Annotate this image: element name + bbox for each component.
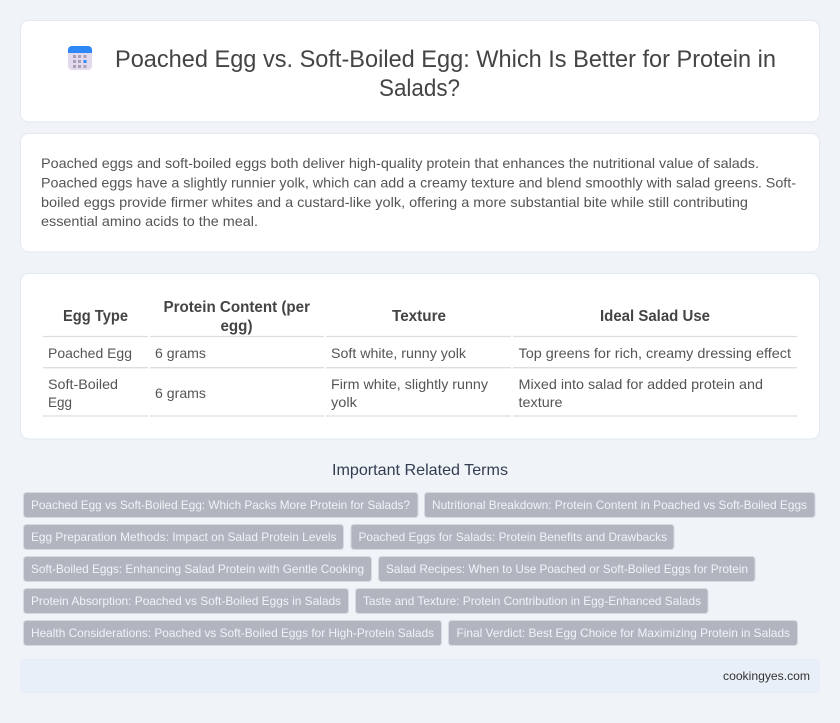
tag: [24, 556, 372, 582]
panel: introduction: [20, 134, 820, 252]
table row: soft-boiled egg: [43, 376, 797, 416]
tag: [424, 492, 815, 518]
table row: poached egg: Poached Egg: [48, 345, 132, 361]
tag: Protein Absorption: Poached vs Soft-Boiled Eggs in Salads: [31, 594, 341, 608]
intro paragraph: Poached eggs and soft-boiled eggs both deliver high-quality protein that enhances the nutritional value of salads.: [41, 155, 759, 171]
title: Salads?: [379, 75, 460, 102]
intro paragraph: essential amino acids to the meal.: [41, 213, 258, 229]
icon: calendar: [68, 46, 92, 70]
table header row: Protein Content (per: [164, 299, 310, 316]
tag: [24, 492, 418, 518]
panel: title header: [20, 20, 820, 122]
tag: [24, 588, 348, 614]
table header row: Texture: [392, 308, 446, 325]
table header row: Ideal Salad Use: [600, 308, 710, 325]
tag: Poached Eggs for Salads: Protein Benefits and Drawbacks: [358, 530, 667, 544]
tag: [24, 620, 442, 646]
tag: [24, 524, 344, 550]
table header row: [43, 299, 797, 336]
heading: important related terms: Important Related Terms: [332, 462, 508, 479]
table row: soft-boiled egg: Mixed into salad for added protein and: [518, 376, 763, 392]
tag: Health Considerations: Poached vs Soft-Boiled Eggs for High-Protein Salads: [31, 626, 434, 640]
title: [115, 46, 776, 102]
intro paragraph: Poached eggs have a slightly runnier yolk, which can add a creamy texture and blend smoothly with salad greens. Soft-: [41, 174, 796, 190]
intro paragraph: [41, 155, 796, 229]
table row: soft-boiled egg: Egg: [48, 394, 72, 410]
table row: soft-boiled egg: texture: [518, 394, 563, 410]
table header row: egg): [220, 318, 252, 335]
table header row: Egg Type: [63, 308, 128, 325]
tag: [351, 524, 674, 550]
tag: Poached Egg vs Soft-Boiled Egg: Which Packs More Protein for Salads?: [31, 498, 410, 512]
table row: soft-boiled egg: 6 grams: [155, 385, 206, 401]
tag: Salad Recipes: When to Use Poached or Soft-Boiled Eggs for Protein: [386, 562, 748, 576]
tag: [378, 556, 755, 582]
tag: Soft-Boiled Eggs: Enhancing Salad Protein with Gentle Cooking: [31, 562, 364, 576]
table row: poached egg: [43, 345, 797, 368]
tag: Egg Preparation Methods: Impact on Salad Protein Levels: [31, 530, 336, 544]
tag: Nutritional Breakdown: Protein Content in Poached vs Soft-Boiled Eggs: [432, 498, 807, 512]
intro paragraph: boiled eggs provide firmer whites and a custard-like yolk, offering a more substantial bite while still contributing: [41, 194, 748, 210]
table row: poached egg: 6 grams: [155, 345, 206, 361]
tag: Taste and Texture: Protein Contribution in Egg-Enhanced Salads: [363, 594, 701, 608]
footer bar: [20, 659, 820, 693]
tag: [448, 620, 798, 646]
table row: poached egg: Soft white, runny yolk: [331, 345, 467, 361]
table row: soft-boiled egg: Soft-Boiled: [48, 376, 118, 392]
tag: [356, 588, 708, 614]
table row: poached egg: Top greens for rich, creamy dressing effect: [518, 345, 791, 361]
title: Poached Egg vs. Soft-Boiled Egg: Which Is Better for Protein in: [115, 46, 776, 73]
panel: comparison table: [20, 274, 820, 439]
source credit: cookingyes.com: [723, 669, 810, 683]
related term tags: [24, 492, 815, 646]
tag: Final Verdict: Best Egg Choice for Maximizing Protein in Salads: [456, 626, 790, 640]
table row: soft-boiled egg: yolk: [331, 394, 358, 410]
table row: soft-boiled egg: Firm white, slightly runny: [331, 376, 488, 392]
